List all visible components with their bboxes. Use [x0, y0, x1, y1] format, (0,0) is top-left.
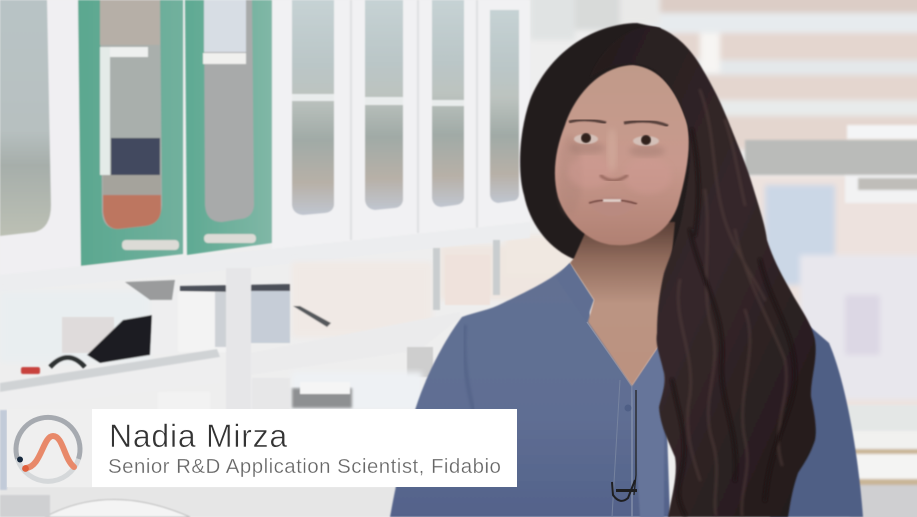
clutter below bench [292, 372, 422, 410]
green door one [78, 0, 183, 266]
neck [570, 222, 675, 386]
green door two [185, 0, 272, 255]
bench left [0, 349, 220, 392]
job title: Senior R&D Application Scientist, Fidabio [108, 455, 501, 478]
hair strands [672, 90, 795, 515]
white cabinet left [0, 0, 80, 275]
white cabinets right [272, 0, 530, 249]
laboratory cabinets [0, 0, 530, 292]
face shading [558, 135, 582, 215]
storage box [62, 317, 114, 353]
laboratory bench and equipment [0, 240, 500, 517]
lower third name caption [7, 409, 517, 487]
sleeve right [770, 318, 863, 517]
hair back [520, 23, 700, 290]
black monitor [87, 315, 152, 363]
shelf under cabinets [0, 222, 530, 292]
bench right [250, 312, 460, 375]
shirt [390, 263, 670, 517]
lower floor strip [0, 487, 400, 517]
central post [226, 268, 251, 410]
pillar [152, 282, 177, 354]
logo block [7, 409, 92, 487]
face [555, 65, 689, 245]
eyes [574, 134, 598, 144]
dark handle [50, 358, 85, 367]
microphone [634, 390, 636, 495]
red item [21, 367, 40, 374]
shirt collar and placket [556, 263, 594, 322]
icon: Fidabio logo [14, 414, 82, 484]
shirt button [624, 404, 632, 412]
nose [600, 175, 628, 180]
name: Nadia Mirza [109, 418, 288, 454]
eyebrows [569, 120, 606, 123]
person [390, 23, 863, 517]
hair main long right [590, 27, 816, 517]
mouth [589, 197, 637, 216]
